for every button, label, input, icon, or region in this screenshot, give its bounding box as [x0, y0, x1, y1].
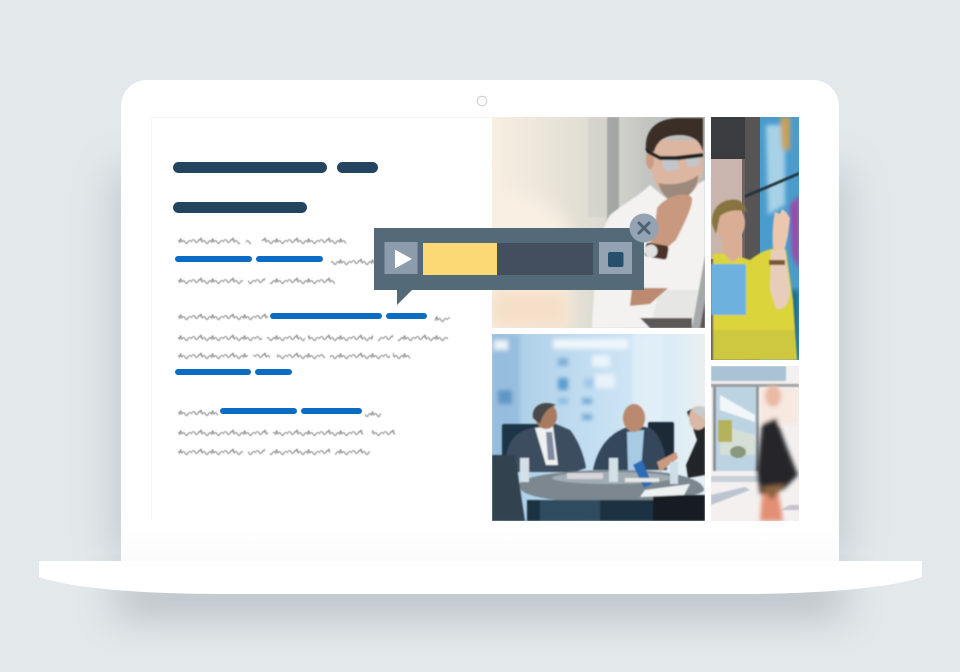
progress track [423, 243, 593, 275]
player panel with pointer tail [374, 228, 644, 305]
heading bars [173, 162, 378, 213]
paragraph 2 scribble [178, 308, 450, 361]
photo: blurred walker in glass lobby [711, 366, 799, 521]
photo: man thinking with glasses [492, 117, 705, 328]
photo: woman presenting with laptop [711, 117, 799, 360]
paragraph 1 scribble [178, 232, 374, 286]
close button [630, 214, 658, 242]
paragraph 3 scribble [178, 404, 395, 457]
laptop shadow [112, 170, 848, 616]
paragraph 3 links [220, 408, 362, 414]
screen edge [152, 118, 492, 521]
stop button [599, 242, 632, 274]
photo: business meeting at table [492, 334, 707, 521]
laptop lid [121, 80, 839, 561]
paragraph 1 links [175, 256, 323, 262]
webcam [477, 96, 487, 106]
play button [384, 242, 418, 274]
audio player [374, 214, 658, 305]
illustration: laptop mockup [39, 80, 922, 634]
laptop base [39, 561, 922, 594]
document panel [173, 162, 450, 457]
paragraph 2 links [175, 313, 427, 375]
